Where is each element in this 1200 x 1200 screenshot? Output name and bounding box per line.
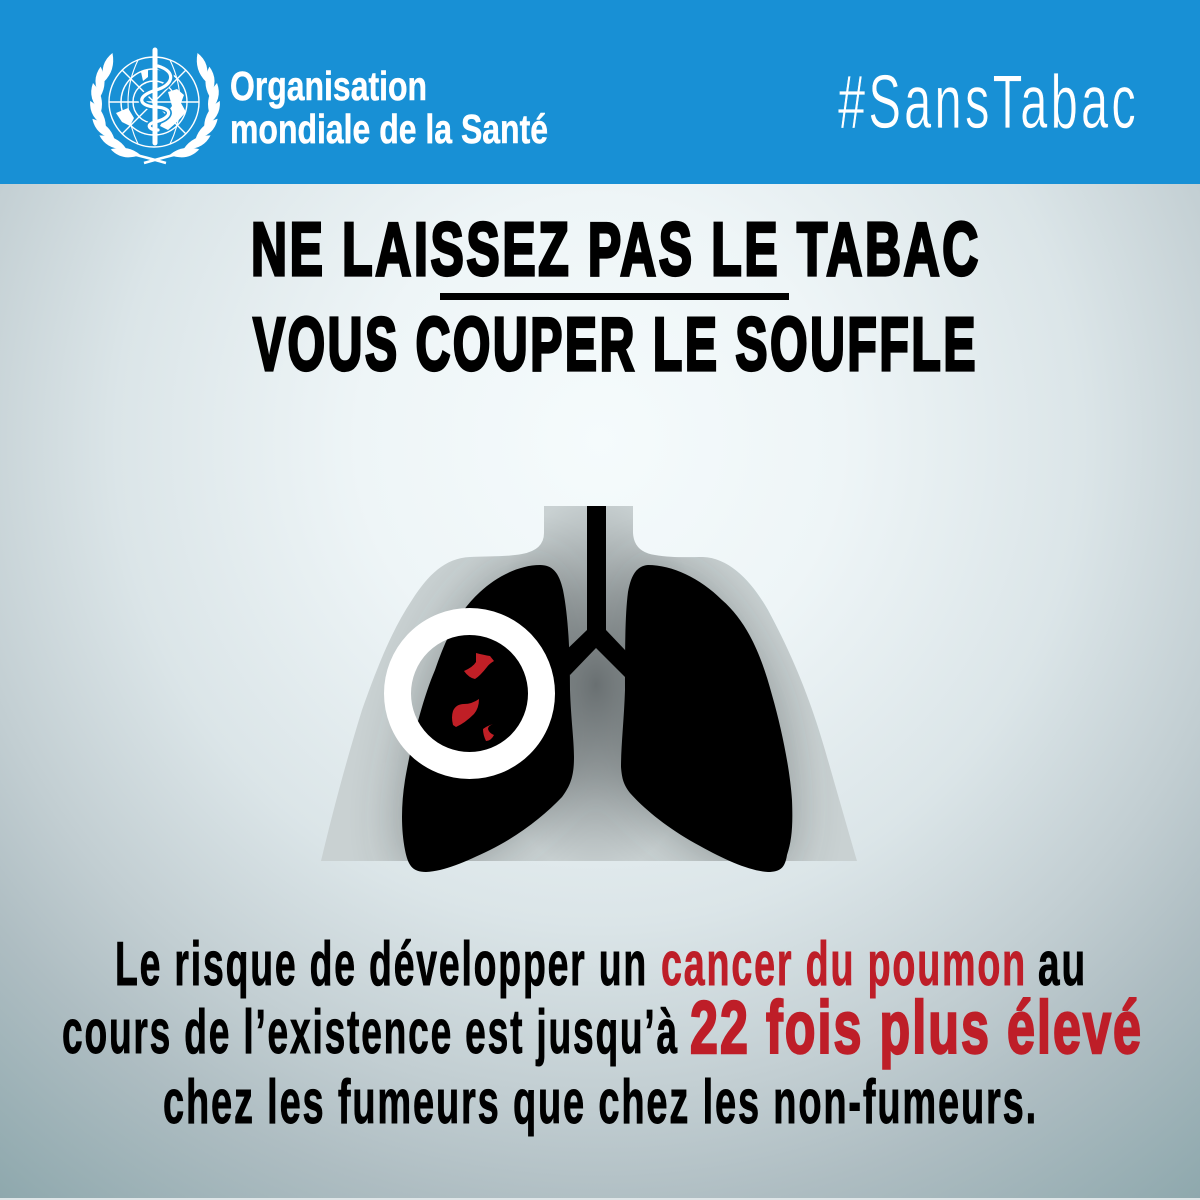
title — [251, 207, 981, 386]
line 2: cours de l’existence est jusqu’à — [62, 998, 679, 1067]
magnifier ring — [398, 622, 542, 766]
right lung — [621, 565, 792, 872]
staff and serpent — [142, 50, 171, 143]
line 1: Le risque de développer un — [115, 930, 648, 999]
organisation name: mondiale de la Santé — [230, 106, 548, 152]
statement text — [62, 930, 1143, 1137]
chest silhouette — [321, 506, 857, 861]
organisation name — [230, 63, 548, 152]
globe — [109, 57, 199, 147]
organisation name: Organisation — [230, 63, 427, 109]
line 1: au — [1038, 930, 1087, 999]
header band — [0, 0, 1200, 184]
icon: WHO emblem — [88, 50, 222, 164]
lungs illustration — [310, 495, 870, 875]
tumours — [452, 653, 494, 741]
bottom edge strip — [0, 1198, 1200, 1200]
trachea and bronchi — [559, 506, 650, 687]
left lung — [402, 565, 574, 872]
wreath — [88, 52, 222, 164]
continents — [116, 69, 186, 130]
